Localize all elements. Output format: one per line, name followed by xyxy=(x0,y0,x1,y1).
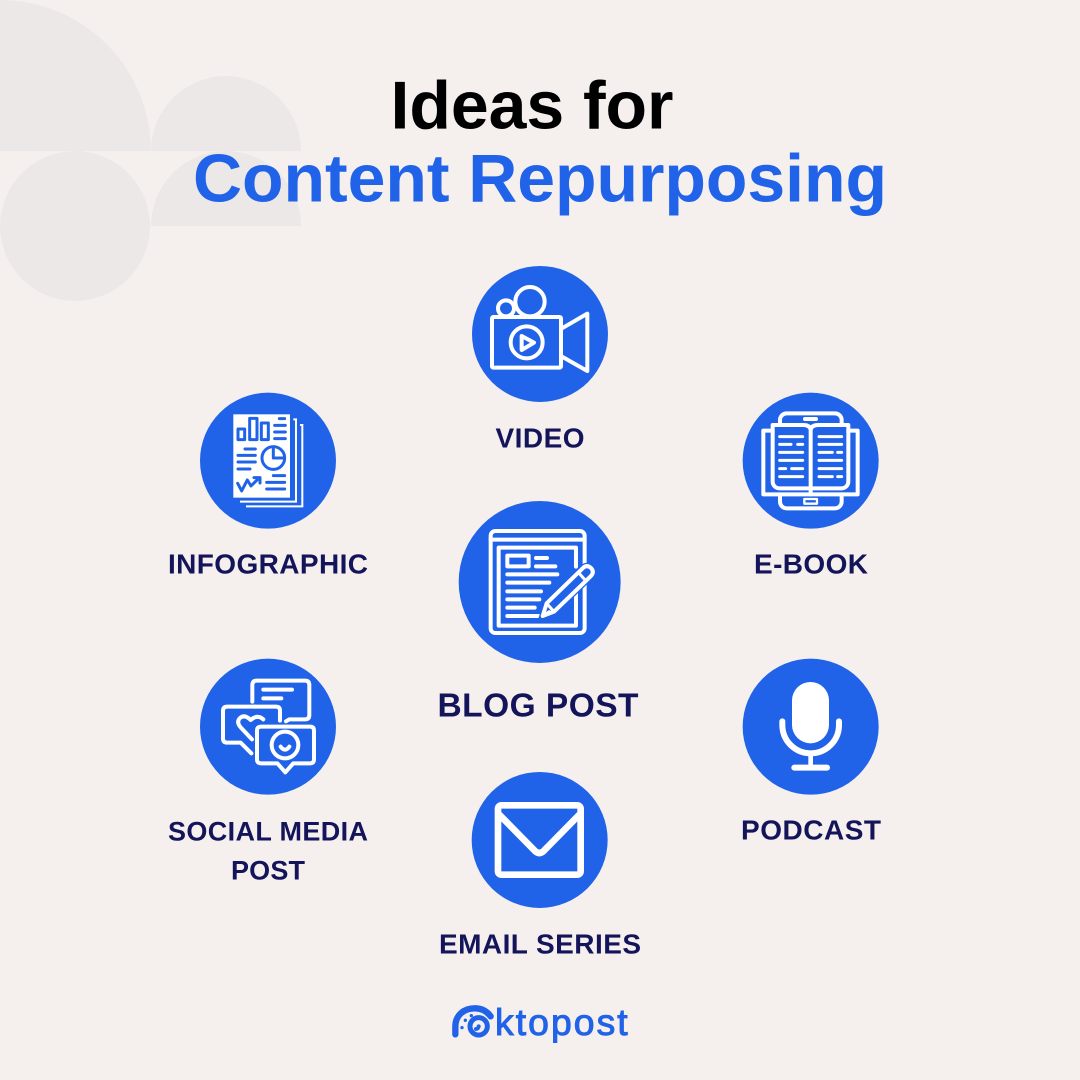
icon: infographic xyxy=(200,393,336,529)
label: social media post: SOCIAL MEDIA xyxy=(168,816,368,846)
icon: blog post xyxy=(459,501,621,663)
icon: video camera xyxy=(472,266,608,402)
label: blog post: BLOG POST xyxy=(438,688,639,724)
label: e-book: E-BOOK xyxy=(754,548,868,580)
title xyxy=(193,68,887,216)
title: Content Repurposing xyxy=(193,140,887,216)
label: podcast: PODCAST xyxy=(741,814,881,846)
icon: email envelope xyxy=(472,772,608,908)
icon: social media xyxy=(200,659,336,795)
label: social media post: POST xyxy=(231,856,306,886)
label: video: VIDEO xyxy=(496,422,584,454)
label: social media post xyxy=(168,816,368,886)
label: email series: EMAIL SERIES xyxy=(439,928,641,960)
logo: oktopost: ktopost xyxy=(495,1001,628,1043)
title: Ideas for xyxy=(390,68,674,144)
icon: e-book xyxy=(743,393,879,529)
icon: microphone xyxy=(743,659,879,795)
label: infographic: INFOGRAPHIC xyxy=(168,548,368,580)
